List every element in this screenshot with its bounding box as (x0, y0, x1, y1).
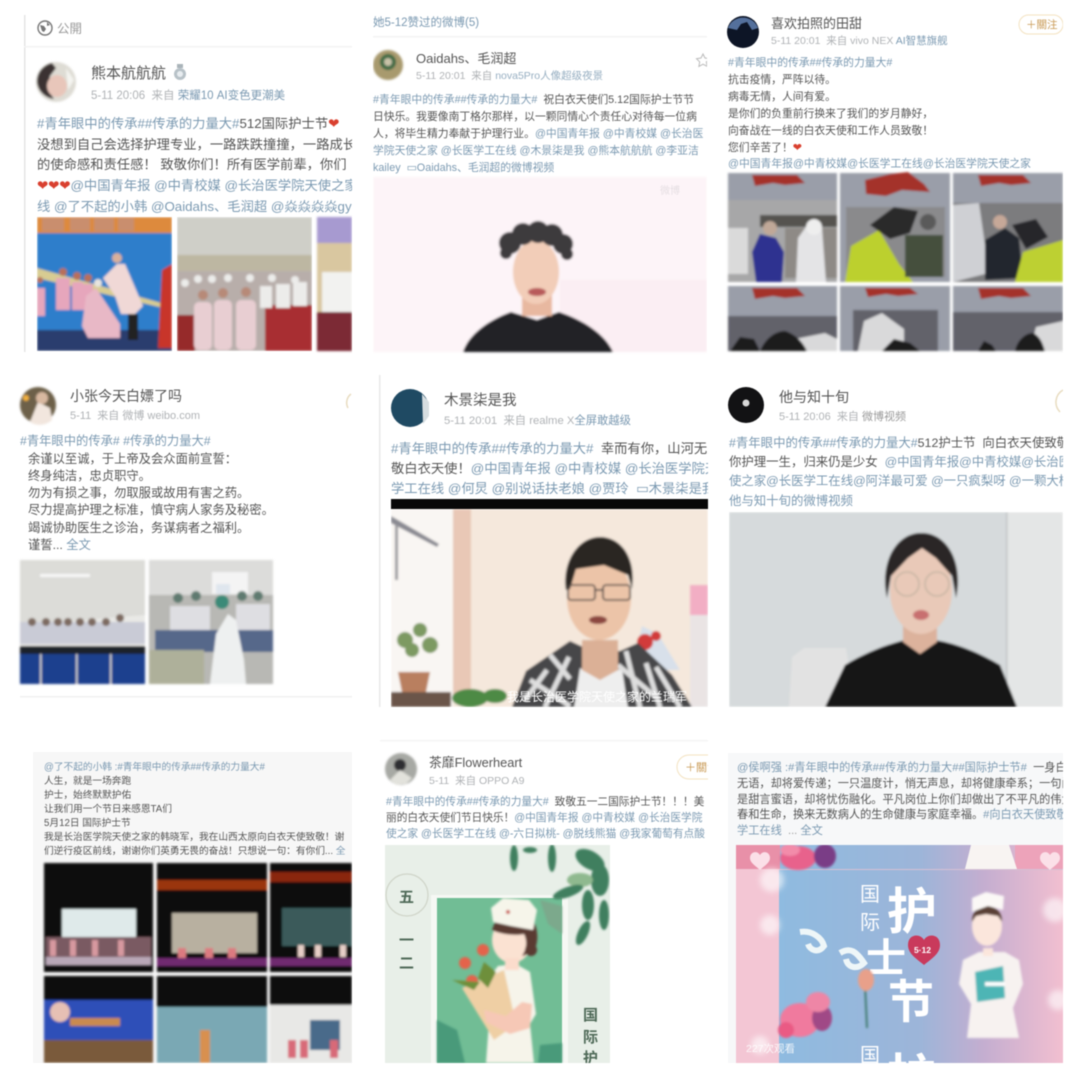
photo: assembly hall crowd (177, 217, 312, 351)
date and source: 5-11 20:06 来自 微博视频 (779, 409, 906, 423)
header: liked posts: 她5-12赞过的微博(5) (373, 15, 479, 29)
subtitle: 我是长治医学院天使之家的兰瑞军 (507, 689, 687, 704)
heart decorations (750, 852, 1060, 870)
post text: #青年眼中的传承##传承的力量大# 幸而有你，山河无恙 (391, 441, 720, 456)
post text: 向奋战在一线的白衣天使和工作人员致敬！ (728, 123, 933, 137)
date and source: 5-11 20:01 来自 realme X全屏敢越级 (444, 413, 631, 427)
video still: woman with round glasses (729, 512, 1063, 707)
avatar: black vinyl disc (728, 387, 764, 423)
poster title (860, 884, 937, 1080)
post text: 我是长治医学院天使之家的韩晓军，我在山西太原向白衣天使致敬！谢 (44, 830, 345, 843)
avatar: 小张 (20, 387, 56, 425)
partial follow button (347, 394, 351, 408)
post text: 谨誓... 全文 (28, 537, 91, 552)
nurse figure (959, 892, 1023, 1038)
icon: medal badge (174, 64, 186, 80)
poster title: 护 (887, 884, 937, 940)
video still: young man with curly hair (373, 177, 707, 352)
button: follow: ＋關注 (1026, 18, 1058, 31)
nurse figure (452, 898, 537, 1063)
photo: nurse capping ceremony stage (37, 217, 172, 351)
post text: 5月12日 国际护士节 (44, 816, 131, 829)
heart: 5.12: 5·12 (914, 945, 931, 955)
post text (728, 55, 1031, 170)
icon: star (696, 54, 710, 66)
post text: 使之家 @长医学工在线 @-六日拟桃- @脱线熊猫 @我家葡萄有点酸 (386, 827, 705, 840)
post text (20, 433, 274, 552)
circle ornament and vertical title: 一 (399, 932, 414, 949)
circle ornament and vertical title (386, 874, 598, 1067)
panel: post by 喜欢拍照的田甜 (727, 15, 1063, 351)
panel: post by 小张今天白嫖了吗 (20, 387, 352, 698)
circle ornament and vertical title: 五 (399, 889, 414, 906)
avatar: 木景柒 (391, 389, 429, 427)
post text: 抗击疫情，严阵以待。 (728, 72, 836, 86)
post text: 竭诚协助医生之诊治，务谋病者之福利。 (28, 520, 249, 535)
poster title: 士 (866, 937, 906, 981)
circle ornament and vertical title: 际 (583, 1029, 598, 1046)
post text: 人，将毕生精力奉献于护理行业。@中国青年报 @中青校媒 @长治医 (373, 126, 704, 140)
post text: #青年眼中的传承##传承的力量大#512护士节 向白衣天使致敬 (729, 435, 1070, 450)
date and source: 5-11 20:01 来自 vivo NEX AI智慧旗舰 (771, 34, 948, 47)
photo grid: stage performances (44, 863, 352, 1063)
post text: 学院天使之家 @长医学工在线 @木景柒是我 @熊本航航航 @李亚洁 (373, 143, 699, 157)
avatar: 茶靡 (385, 753, 417, 785)
post text: 丽的白衣天使们节日快乐！@中国青年报 @中青校媒 @长治医学院 (386, 811, 703, 824)
panel: post by 侯啊强 (728, 753, 1080, 1080)
partial follow button (1056, 390, 1063, 412)
button: follow (1019, 15, 1063, 34)
photo: third ceremony thumbnail (317, 217, 352, 351)
illustration: nurse with bouquet (385, 844, 610, 1067)
post text: @侯啊强 :#青年眼中的传承##传承的力量大##国际护士节# 一身白衣 (737, 760, 1078, 774)
circle ornament and vertical title: 护 (583, 1050, 598, 1067)
post text (373, 92, 704, 174)
post text: 的使命感和责任感！ 致敬你们！所有医学前辈，你们 (37, 156, 347, 172)
post text: 日快乐。我要像南丁格尔那样，以一颗同情心个责任心对待每一位病 (373, 109, 697, 123)
post text: #青年眼中的传承##传承的力量大#512国际护士节❤ (37, 116, 339, 131)
label: public: 公開 (57, 22, 82, 36)
post text (737, 760, 1080, 837)
post text: 们逆行疫区前线，谢谢你们英勇无畏的奋战！只想说一句：有你们... 全 (44, 844, 346, 857)
post text: @了不起的小韩 :#青年眼中的传承##传承的力量大# (44, 760, 265, 773)
post text: 尽力提高护理之标准，慎守病人家务及秘密。 (28, 502, 274, 517)
panel: post by Oaidahs、毛润超 (373, 15, 710, 352)
post text (391, 441, 731, 496)
flowers (778, 844, 836, 1038)
username: 他与知十旬 (779, 389, 849, 405)
panel: post by 茶靡Flowerheart (380, 740, 737, 1067)
photo: nursing training at bedside (149, 560, 273, 684)
post text: 春和生命，换来无数病人的生命健康与家庭幸福。#向白衣天使致敬 (737, 807, 1068, 821)
post text: 终身纯洁，忠贞职守。 (28, 468, 151, 483)
post text: 人生，就是一场奔跑 (44, 774, 131, 787)
post text: 你护理一生，归来仍是少女 @中国青年报@中青校媒@长治医学 (729, 454, 1080, 469)
post text: ❤❤❤@中国青年报 @中青校媒 @长治医学院天使之家 (37, 177, 358, 193)
icon: globe (38, 21, 52, 35)
post text: 余谨以至诚，于上帝及会众面前宣誓： (28, 451, 237, 466)
circle ornament and vertical title: 二 (399, 955, 414, 972)
username: 喜欢拍照的田甜 (771, 16, 862, 31)
panel: post by 熊本航航航 (24, 15, 358, 352)
button: follow (677, 755, 737, 779)
photo: students in lab (20, 560, 145, 684)
post text: #青年眼中的传承# #传承的力量大# (20, 433, 211, 448)
post text: 使之家@长医学工在线@阿洋最可爱 @一只疯梨呀 @一颗大桃 (729, 473, 1072, 488)
avatar: Oaidahs (373, 50, 403, 80)
username: 小张今天白嫖了吗 (70, 388, 182, 404)
post text (729, 435, 1080, 508)
poster title: 际 (860, 911, 880, 934)
poster title: 节 (888, 976, 934, 1028)
heart: 5.12 (908, 936, 940, 965)
username: 茶靡Flowerheart (429, 755, 523, 770)
blue gradient banner (779, 845, 1063, 1063)
leaves (437, 844, 609, 1063)
inner green card (431, 895, 568, 1063)
watermark: weibo: 微博 (660, 184, 680, 197)
flower stem (858, 969, 874, 1028)
post text: kailey ▭Oaidahs、毛润超的微博视频 (373, 160, 554, 174)
post text: 您们辛苦了！❤ (728, 140, 802, 154)
poster title: 国 (860, 1045, 880, 1067)
username: 木景柒是我 (444, 392, 516, 409)
post text: 让我们用一个节日来感恩TA们 (44, 802, 172, 815)
avatar: 熊本航航航 (36, 62, 76, 102)
post text: 他与知十旬的微博视频 (729, 493, 853, 508)
panel: post by 韩晓军 (33, 752, 352, 1063)
post text: 是甜言蜜语，却将忧伤融化。平凡岗位上你们却做出了不平凡的伟大 (737, 792, 1073, 806)
photo grid: anti-epidemic frontline (728, 172, 1063, 351)
poster title: 国 (860, 884, 880, 906)
post text: 勿为有损之事，勿取服或故用有害之药。 (28, 485, 249, 500)
panel: post by 他与知十旬 (728, 387, 1080, 707)
circle ornament and vertical title: 国 (583, 1007, 598, 1024)
post text: #青年眼中的传承##传承的力量大# 致敬五一二国际护士节！！！美 (386, 795, 705, 808)
date and source: 5-11 来自 微博 weibo.com (70, 408, 200, 422)
username: Oaidahs、毛润超 (416, 51, 516, 66)
avatar: night mountain (727, 16, 759, 48)
wings (800, 932, 864, 967)
black letterbox bar (391, 499, 708, 509)
username: 熊本航航航 (91, 65, 166, 82)
date and source: 5-11 来自 OPPO A9 (429, 774, 525, 787)
post text: #青年眼中的传承##传承的力量大# 祝白衣天使们5.12国际护士节节 (373, 92, 694, 106)
post text: 敬白衣天使！@中国青年报 @中青校媒 @长治医学院天使 (391, 460, 731, 476)
date and source: 5-11 20:06 来自 荣耀10 AI变色更潮美 (91, 88, 286, 102)
panel: post by 木景柒是我 (379, 375, 731, 708)
post text: 没想到自己会选择护理专业，一路跌跌撞撞，一路成长 (37, 137, 356, 152)
date and source: 5-11 20:01 来自 nova5Pro人像超级夜景 (416, 69, 603, 82)
post text: 学工在线 ... 全文 (737, 823, 823, 837)
post text: 无语，却将爱传递；一只温度计，悄无声息，却将健康牵系；一句问候 (737, 776, 1080, 790)
post text (37, 116, 358, 214)
post text (44, 760, 346, 857)
post text: 线 @了不起的小韩 @Oaidahs、毛润超 @焱焱焱焱gy (37, 199, 352, 214)
post text: 护士，始终默默护佑 (44, 788, 131, 801)
post text (386, 795, 705, 840)
post text: #青年眼中的传承##传承的力量大# (728, 55, 892, 69)
post text: 病毒无情，人间有爱。 (728, 89, 836, 103)
view count caption: 227次观看 (746, 1042, 795, 1055)
post text: 学工在线 @何炅 @别说话扶老娘 @贾玲 ▭木景柒是我 (391, 481, 715, 496)
illustration: International Nurses Day poster (736, 844, 1068, 1080)
post text: @中国青年报@中青校媒@长医学工在线@长治医学院天使之家 (728, 156, 1031, 170)
button: follow: ＋關注 (685, 760, 718, 774)
post text: 是你们的负重前行换来了我们的岁月静好， (728, 106, 933, 120)
video still: man with glasses (391, 509, 708, 708)
